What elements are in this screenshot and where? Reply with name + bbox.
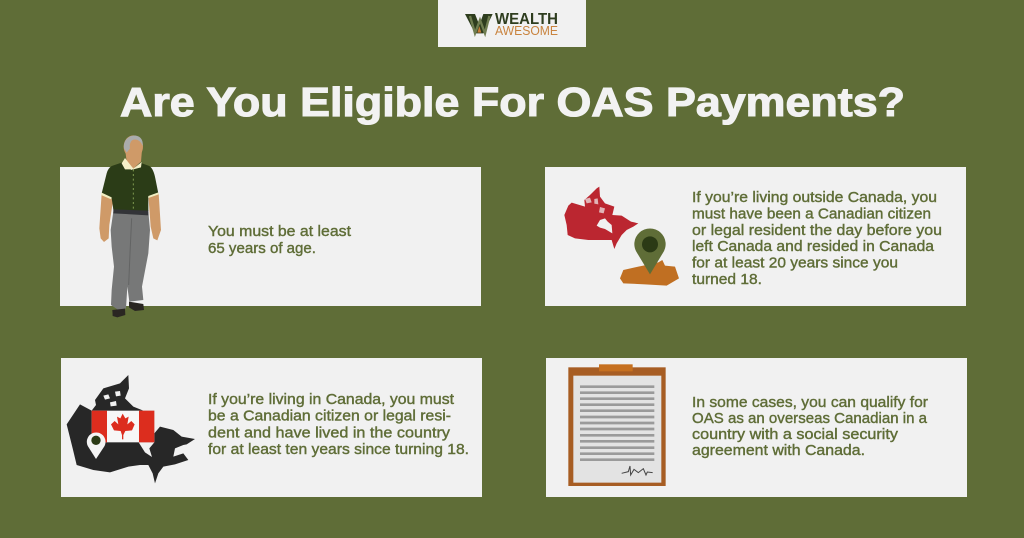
icon: elderly man standing [99, 135, 161, 317]
text: overseas: agreement with Canada. [692, 443, 865, 459]
text: age [208, 224, 351, 257]
text: overseas: In some cases, you can qualify for [692, 395, 928, 411]
text: in Canada: for at least ten years since turning 18. [208, 442, 469, 458]
logo: AWESOME [495, 23, 558, 38]
logo: WEALTH [495, 11, 558, 28]
text: outside Canada [692, 190, 942, 288]
panel: overseas agreement [546, 358, 967, 497]
panel: living outside Canada [545, 167, 966, 306]
text: in Canada: be a Canadian citizen or legal resi- [208, 409, 451, 425]
icon: dark Canada map with flag and pin [67, 375, 195, 483]
icon: red Canada map with location pin [564, 187, 679, 286]
text: outside Canada: must have been a Canadian citizen [692, 206, 931, 222]
logo [438, 0, 586, 47]
panel: age requirement [60, 167, 481, 306]
text: overseas: country with a social security [692, 427, 899, 443]
text: in Canada: dent and have lived in the country [208, 425, 451, 441]
text: outside Canada: If you’re living outside Canada, you [692, 190, 937, 206]
icon: clipboard document [568, 364, 666, 486]
title: Are You Eligible For OAS Payments? [120, 79, 905, 125]
text: outside Canada: turned 18. [692, 272, 762, 288]
text: overseas: OAS as an overseas Canadian in a [692, 411, 928, 427]
text: age: 65 years of age. [208, 241, 316, 257]
text: outside Canada: or legal resident the day before you [692, 223, 942, 239]
text: outside Canada: left Canada and resided in Canada [692, 239, 935, 255]
text: overseas [692, 395, 928, 459]
flag [92, 411, 154, 442]
text: outside Canada: for at least 20 years since you [692, 256, 898, 272]
text: age: You must be at least [208, 224, 351, 240]
text: in Canada: If you’re living in Canada, you must [208, 392, 454, 408]
text: in Canada [208, 392, 469, 458]
panel: living in Canada [61, 358, 482, 497]
